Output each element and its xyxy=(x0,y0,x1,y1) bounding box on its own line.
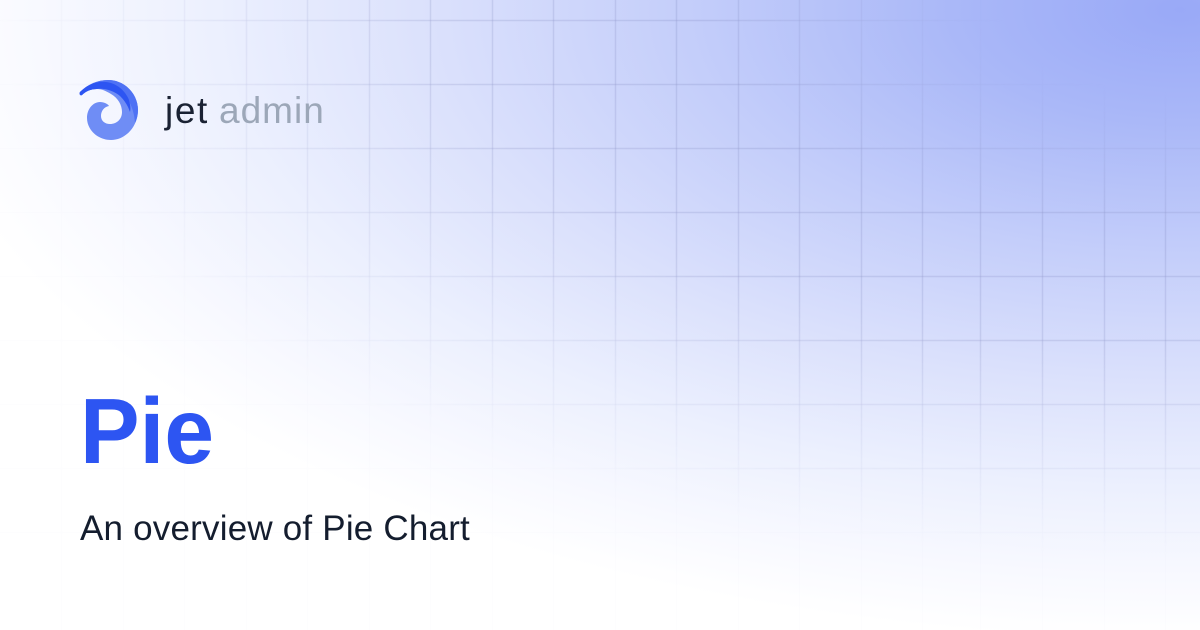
logo wordmark: admin xyxy=(219,90,325,131)
logo wordmark: jet xyxy=(165,90,209,131)
subtitle: An overview of Pie Chart xyxy=(80,509,470,548)
logo wordmark xyxy=(164,90,325,131)
icon: swirl xyxy=(80,80,138,140)
title: Pie xyxy=(80,379,214,483)
logo: jet admin xyxy=(80,80,325,140)
